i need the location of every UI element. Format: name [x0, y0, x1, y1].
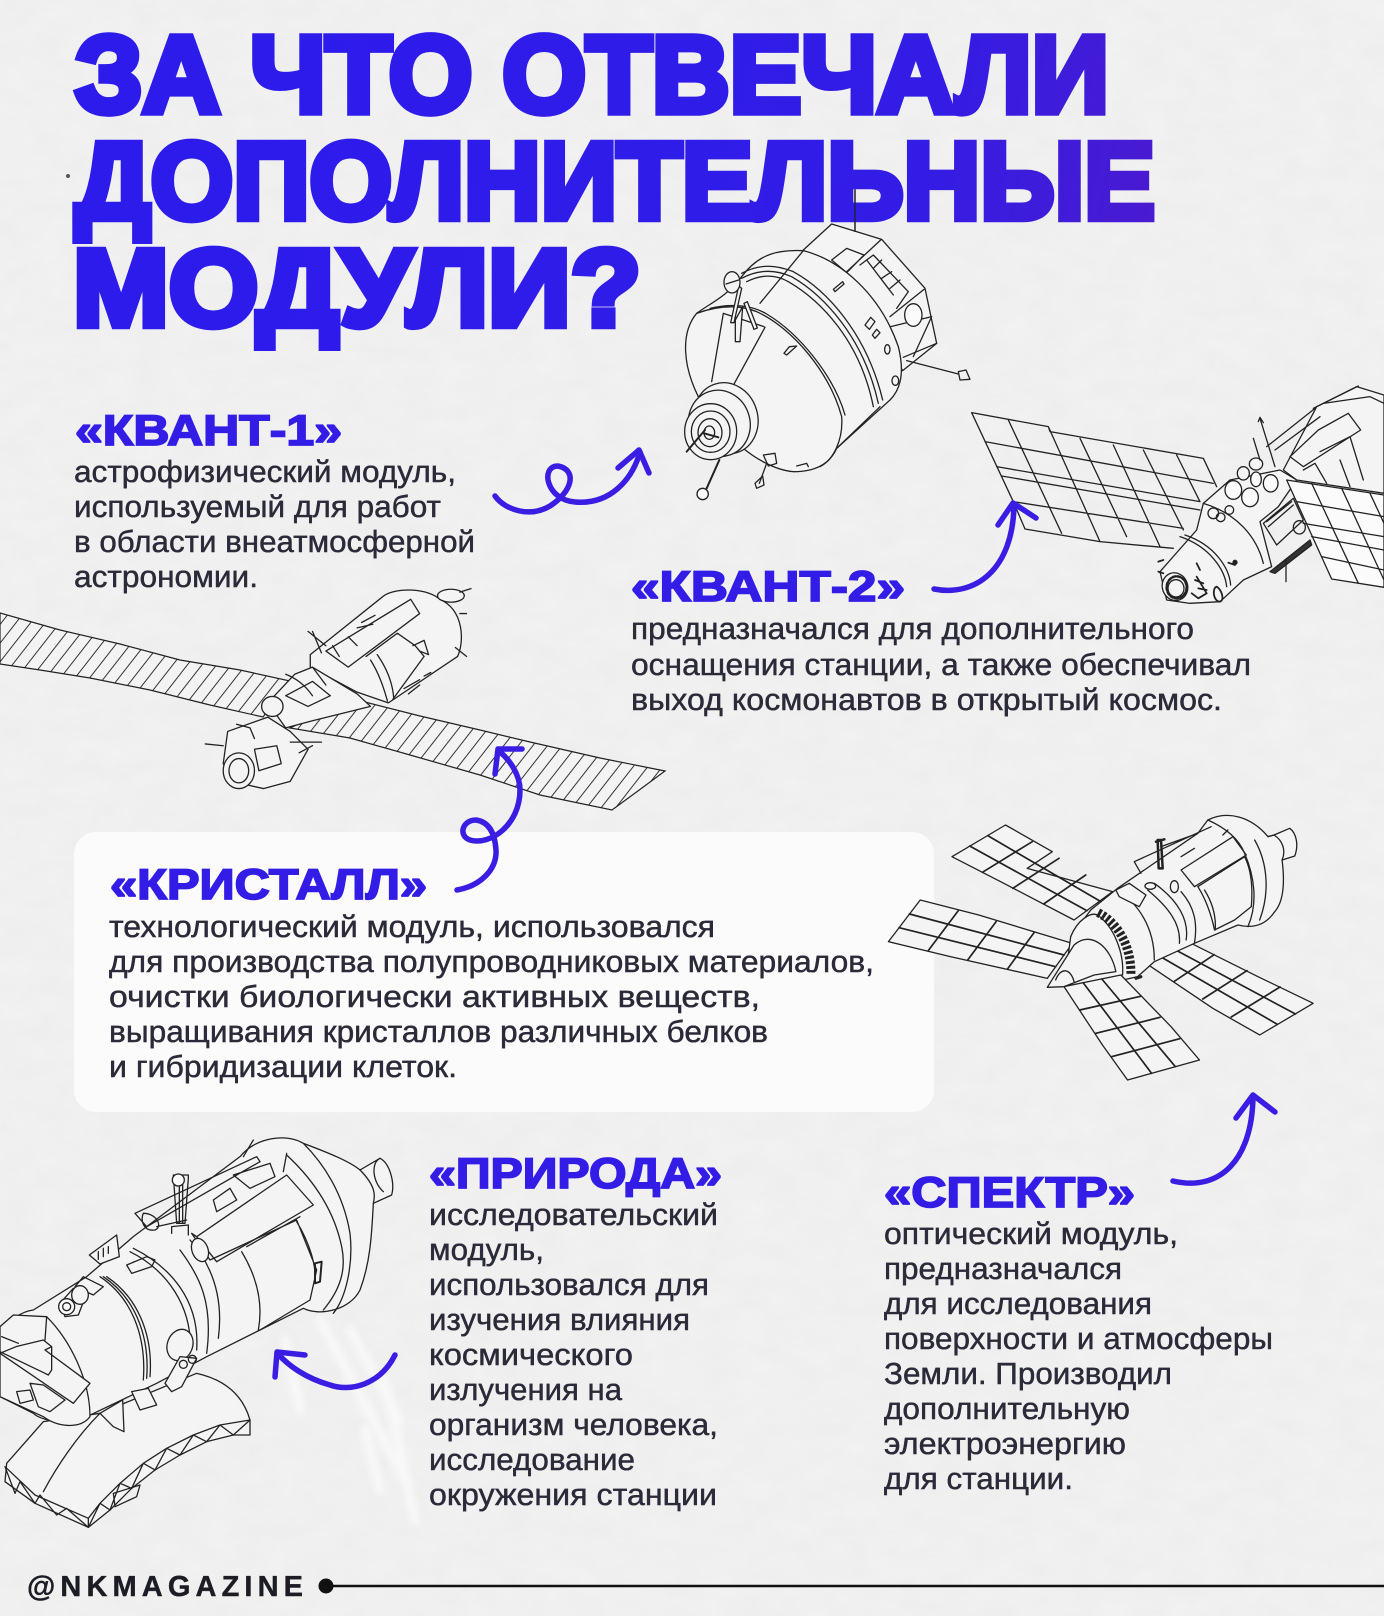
text block: Priroda: исследовательский	[429, 1198, 718, 1232]
body text: Kristall	[109, 910, 874, 1084]
solar panel: left	[888, 900, 1072, 978]
footer: handle and rule: @NKMAGAZINE	[27, 1571, 303, 1603]
solar panel: lower	[1064, 975, 1199, 1080]
text block: Kvant-1: в области внеатмосферной	[74, 525, 475, 559]
body text: Kristall: и гибридизации клеток.	[109, 1050, 457, 1084]
right solar panel	[1287, 480, 1384, 587]
title: МОДУЛИ?	[73, 228, 641, 350]
arrow: Kvant-1	[495, 450, 649, 512]
station body	[205, 589, 471, 789]
footer: handle and rule	[27, 1571, 1384, 1603]
body text: Kristall: для производства полупроводниковых материалов,	[109, 945, 874, 979]
text block: Spektr: для исследования	[884, 1287, 1152, 1321]
text block: Spektr: «СПЕКТР»	[884, 1169, 1135, 1217]
arrow: Kristall	[457, 749, 522, 890]
body text: Kristall: очистки биологически активных веществ,	[109, 980, 760, 1014]
arrow: Spektr	[1173, 1095, 1275, 1183]
module body	[0, 1138, 393, 1432]
text block: Priroda: исследование	[429, 1443, 635, 1477]
text block: Kvant-2: выход космонавтов в открытый космос.	[631, 683, 1222, 717]
text block: Spektr: поверхности и атмосферы	[884, 1322, 1273, 1356]
body text: Kristall: выращивания кристаллов различных белков	[109, 1015, 768, 1049]
text block: Kvant-1	[74, 407, 475, 594]
text block: Kvant-2: предназначался для дополнительного	[631, 612, 1194, 646]
text block: Spektr: дополнительную	[884, 1392, 1130, 1426]
illustration: Priroda module	[0, 1138, 393, 1527]
antenna over title	[854, 190, 856, 232]
title: ЗА ЧТО ОТВЕЧАЛИ	[75, 14, 1109, 136]
panel: Kristall card	[74, 832, 934, 1112]
text block: Spektr: предназначался	[884, 1252, 1122, 1286]
text block: Priroda	[429, 1150, 722, 1512]
text block: Kvant-2	[631, 563, 1251, 717]
illustration: Spektr module	[888, 815, 1313, 1080]
text block: Spektr: оптический модуль,	[884, 1217, 1178, 1251]
body text: Kristall: технологический модуль, использовался	[109, 910, 715, 944]
text block: Kvant-1: «КВАНТ-1»	[75, 407, 342, 455]
module body	[1047, 815, 1297, 987]
text block: Priroda: «ПРИРОДА»	[429, 1150, 722, 1198]
title: ДОПОЛНИТЕЛЬНЫЕ	[75, 120, 1155, 242]
text block: Kvant-1: используемый для работ	[74, 490, 441, 524]
illustration: Kvant-1 module	[680, 187, 970, 500]
text block: Priroda: использовался для	[429, 1268, 709, 1302]
text block: Priroda: излучения на	[429, 1373, 622, 1407]
text block: Spektr: для станции.	[884, 1462, 1073, 1496]
text block: Priroda: окружения станции	[429, 1478, 717, 1512]
text block: Kvant-2: оснащения станции, а также обеспечивал	[631, 648, 1251, 682]
solar panel: right	[1146, 938, 1313, 1035]
radiator truss ring	[5, 1373, 250, 1527]
text block: Spektr: Земли. Производил	[884, 1357, 1172, 1391]
text block: Priroda: космического	[429, 1338, 633, 1372]
heading: Kristall: «КРИСТАЛЛ»	[110, 861, 427, 909]
text block: Priroda: модуль,	[429, 1233, 544, 1267]
solar panel: upper left	[952, 825, 1113, 920]
solar array	[0, 613, 665, 810]
arrow: Kvant-2	[934, 503, 1036, 590]
text block: Kvant-1: астрофизический модуль,	[74, 455, 456, 489]
title	[73, 14, 1155, 349]
text block: Spektr: электроэнергию	[884, 1427, 1126, 1461]
station body	[1283, 387, 1384, 493]
text block: Kvant-1: астрономии.	[74, 560, 258, 594]
arrow: Priroda	[275, 1352, 395, 1387]
text block: Spektr	[884, 1169, 1273, 1496]
text block: Kvant-2: «КВАНТ-2»	[631, 563, 905, 611]
illustration: Kvant-2 module	[972, 386, 1384, 604]
illustration: Kristall module	[0, 589, 665, 810]
text block: Priroda: организм человека,	[429, 1408, 718, 1442]
text block: Priroda: изучения влияния	[429, 1303, 690, 1337]
left solar panel	[972, 413, 1217, 548]
